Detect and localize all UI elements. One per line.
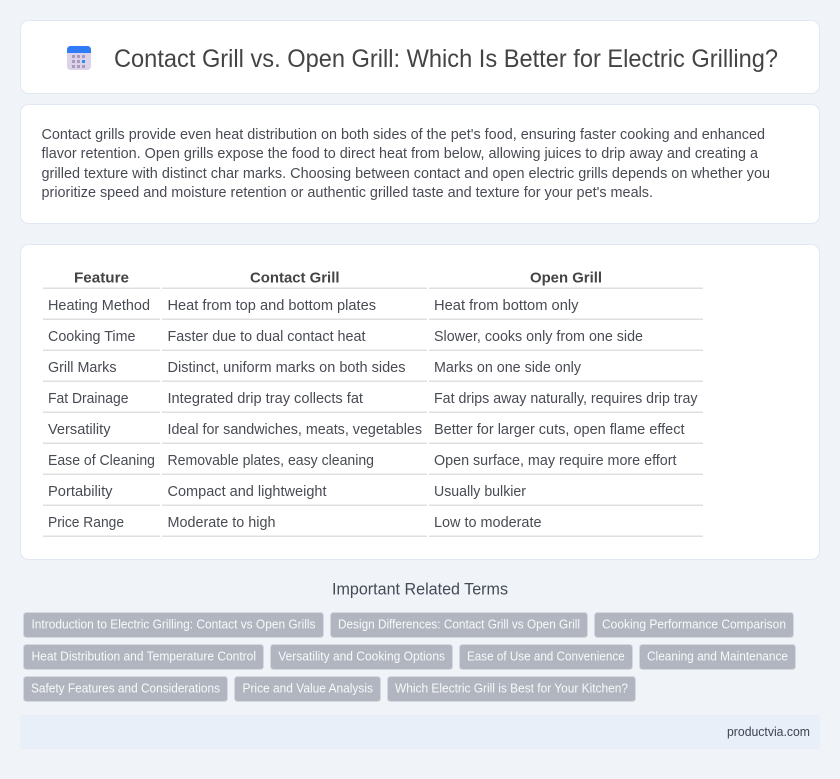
chip: design differences: Design Differences: Contact Grill vs Open Grill [338, 618, 580, 632]
intro paragraph [42, 126, 770, 201]
row: fat drainage: Integrated drip tray collects fat [168, 391, 363, 407]
title: Contact Grill vs. Open Grill: Which Is Better for Electric Grilling? [114, 45, 778, 73]
icon: calendar [67, 46, 91, 70]
panel: introduction [20, 104, 820, 224]
chip: heat distribution: Heat Distribution and Temperature Control [32, 650, 256, 664]
row: ease of cleaning: Removable plates, easy cleaning [168, 453, 374, 469]
row: heating method: Heat from bottom only [434, 298, 579, 314]
row: versatility: Ideal for sandwiches, meats, vegetables [168, 422, 422, 438]
row: heating method: Heat from top and bottom plates [168, 298, 376, 314]
row: cooking time: Cooking Time [48, 329, 136, 345]
chip: price and value [234, 676, 380, 702]
chip: which grill [388, 676, 636, 702]
row: ease of cleaning [43, 453, 703, 475]
row: ease of cleaning: Open surface, may require more effort [434, 453, 676, 469]
footer source text: productvia.com [727, 725, 810, 739]
footer [20, 715, 820, 749]
row: fat drainage: Fat Drainage [48, 391, 128, 407]
row: versatility: Versatility [48, 422, 111, 438]
panel: header [20, 20, 820, 94]
chip: versatility: Versatility and Cooking Options [278, 650, 445, 664]
panel: related term chips [24, 612, 796, 702]
chip: safety [24, 676, 228, 702]
chip: which grill: Which Electric Grill is Best for Your Kitchen? [395, 682, 628, 696]
row: versatility: Better for larger cuts, open flame effect [434, 422, 684, 438]
chip: heat distribution [24, 644, 264, 670]
row: grill marks [43, 360, 703, 382]
row: grill marks: Distinct, uniform marks on both sides [168, 360, 406, 376]
intro paragraph: prioritize speed and moisture retention or authentic grilled taste and texture for your pet's meals. [42, 184, 653, 201]
row: versatility [43, 422, 703, 444]
chip: introduction: Introduction to Electric Grilling: Contact vs Open Grills [32, 618, 316, 632]
row: grill marks: Marks on one side only [434, 360, 582, 376]
row: fat drainage: Fat drips away naturally, requires drip tray [434, 391, 698, 407]
table header row: Contact Grill [250, 270, 340, 286]
row: price range [43, 515, 703, 537]
panel: comparison table [20, 244, 820, 560]
chip: introduction [24, 612, 324, 638]
row: portability: Compact and lightweight [168, 484, 326, 500]
row: grill marks: Grill Marks [48, 360, 116, 376]
row: heating method: Heating Method [48, 298, 150, 314]
row: portability: Portability [48, 484, 113, 500]
row: cooking time [43, 329, 703, 351]
chip: versatility [270, 644, 452, 670]
intro paragraph: Contact grills provide even heat distribution on both sides of the pet's food, ensuring faster cooking and enhanced [42, 126, 765, 143]
table header row [43, 270, 703, 289]
table header row: Feature [74, 270, 129, 286]
row: fat drainage [43, 391, 703, 413]
heading: important related terms: Important Related Terms [332, 580, 508, 598]
chip: design differences [330, 612, 588, 638]
table header row: Open Grill [530, 270, 602, 286]
chip: cleaning: Cleaning and Maintenance [647, 650, 788, 664]
row: price range: Low to moderate [434, 515, 542, 531]
row: portability [43, 484, 703, 506]
row: price range: Price Range [48, 515, 124, 531]
row: heating method [43, 298, 703, 320]
chip: price and value: Price and Value Analysis [242, 682, 373, 696]
chip: cooking performance [594, 612, 794, 638]
row: portability: Usually bulkier [434, 484, 526, 500]
chip: cleaning [640, 644, 796, 670]
chip: cooking performance: Cooking Performance Comparison [602, 618, 786, 632]
row: price range: Moderate to high [168, 515, 276, 531]
row: ease of cleaning: Ease of Cleaning [48, 453, 155, 469]
chip: ease of use [460, 644, 632, 670]
chip: safety: Safety Features and Considerations [31, 682, 220, 696]
row: cooking time: Slower, cooks only from one side [434, 329, 643, 345]
intro paragraph: flavor retention. Open grills expose the food to direct heat from below, allowing juices to drip away and creating a [42, 145, 759, 162]
intro paragraph: grilled texture with distinct char marks. Choosing between contact and open electric grills depends on whether you [42, 165, 770, 182]
chip: ease of use: Ease of Use and Convenience [467, 650, 625, 664]
row: cooking time: Faster due to dual contact heat [168, 329, 366, 345]
